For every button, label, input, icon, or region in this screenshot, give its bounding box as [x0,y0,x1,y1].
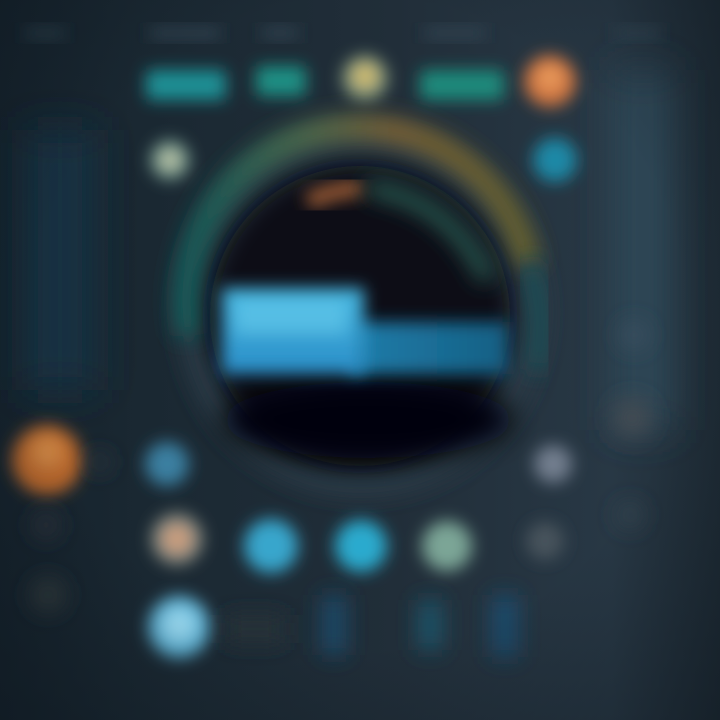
left column panel [25,130,95,390]
pill: second [256,66,306,96]
gauge lower dark band [223,382,513,458]
gauge outer shadow ring [190,140,534,484]
circle: pale upper left [150,140,190,180]
gauge inner orange arc [308,188,362,202]
gauge coloured arc [186,127,528,335]
right column panel [615,70,670,430]
central bar: dim right segment [350,322,508,374]
circle: bright teal [335,520,387,572]
bottom bars [225,595,518,657]
bar: dark [225,615,285,643]
top dim labels [25,28,660,38]
top pill row [146,66,504,100]
circle: grey, mid right [534,445,572,483]
pill: third [420,70,504,100]
bar: blue two [418,600,442,650]
top circle: yellow [342,55,388,101]
bar: blue three [492,595,518,657]
big pale blue circle [148,596,210,658]
gauge dark core [210,166,510,466]
gauge right fade arc [528,265,541,370]
pill: first [146,70,226,100]
circle: tan [151,513,203,565]
circle: sage [422,521,472,571]
circle: blue, mid left [145,442,189,486]
bar: blue one [322,595,346,655]
circle: teal upper right [533,138,577,182]
top circle: orange [524,55,576,107]
big orange circle left [12,425,82,495]
left column dim dots [30,452,110,613]
circle: sky [244,519,298,573]
bottom row circles [151,513,564,573]
circle: dark grey [526,522,564,560]
gauge: large ring [186,127,541,484]
central bar: bright left segment [222,288,364,374]
gauge inner green arc [368,188,488,280]
right column dim dots [612,322,652,528]
